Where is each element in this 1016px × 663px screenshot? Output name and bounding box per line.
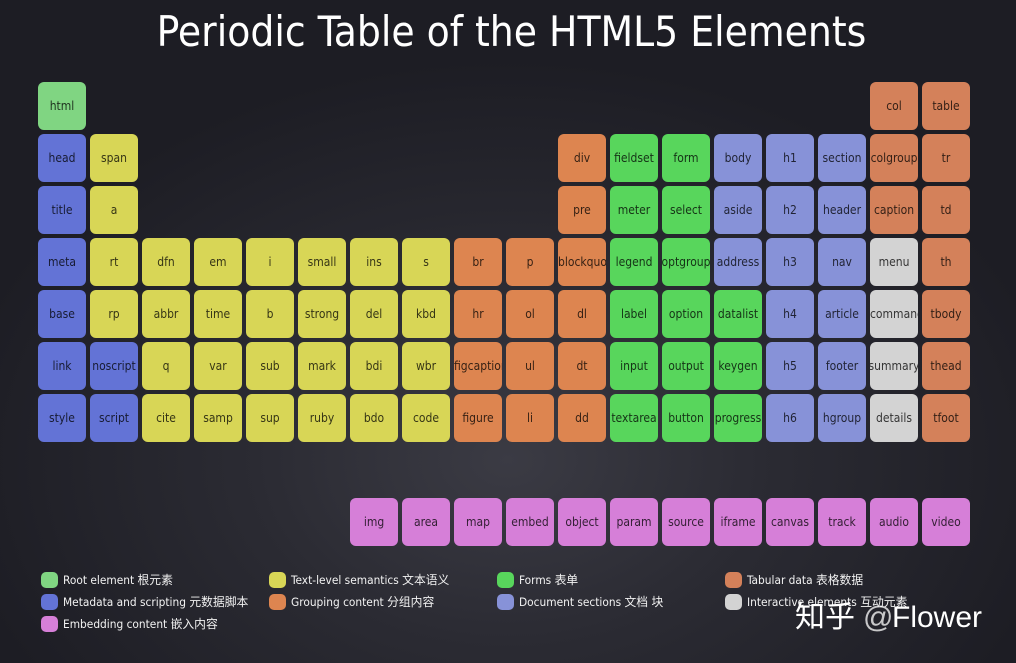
- element: strong: strong: [305, 307, 339, 321]
- element: optgroup: optgroup: [662, 255, 710, 269]
- element: mark: mark: [308, 359, 336, 373]
- element: progress: progress: [715, 411, 761, 425]
- element: figure: [454, 394, 502, 442]
- element: a: a: [111, 203, 117, 217]
- legend item: root element: Root element 根元素: [63, 573, 173, 587]
- element: table: table: [932, 99, 960, 113]
- element: wbr: wbr: [416, 359, 436, 373]
- element: details: details: [876, 411, 912, 425]
- element: base: [38, 290, 86, 338]
- element: div: [558, 134, 606, 182]
- element: fieldset: fieldset: [614, 151, 654, 165]
- element: th: [922, 238, 970, 286]
- element: h1: [766, 134, 814, 182]
- element: fieldset: [610, 134, 658, 182]
- element: label: label: [621, 307, 647, 321]
- element: map: map: [466, 515, 490, 529]
- element: form: form: [673, 151, 699, 165]
- element: select: [662, 186, 710, 234]
- element: h4: [766, 290, 814, 338]
- element: pre: [558, 186, 606, 234]
- element: keygen: keygen: [718, 359, 758, 373]
- element: area: [402, 498, 450, 546]
- element: header: header: [823, 203, 861, 217]
- legend item: forms: [497, 572, 578, 588]
- watermark: 知乎: [795, 601, 855, 634]
- element: summary: [870, 342, 918, 390]
- element: style: style: [49, 411, 75, 425]
- element: sub: sub: [260, 359, 280, 373]
- element: progress: [714, 394, 762, 442]
- legend item: interactive elements: Interactive elements 互动元素: [747, 595, 907, 609]
- element: small: [298, 238, 346, 286]
- element: img: [350, 498, 398, 546]
- legend item: metadata and scripting: Metadata and scripting 元数据脚本: [63, 595, 248, 609]
- element: i: i: [268, 255, 272, 269]
- element: blockquote: [558, 238, 606, 286]
- element: tfoot: [922, 394, 970, 442]
- element: h3: [766, 238, 814, 286]
- element: option: [662, 290, 710, 338]
- element: title: [38, 186, 86, 234]
- element: time: time: [206, 307, 230, 321]
- element: tbody: [922, 290, 970, 338]
- element: audio: audio: [879, 515, 909, 529]
- element: colgroup: colgroup: [871, 151, 917, 165]
- element: p: [506, 238, 554, 286]
- element: h4: h4: [783, 307, 797, 321]
- element: span: [90, 134, 138, 182]
- element: button: button: [668, 411, 704, 425]
- element: dd: dd: [575, 411, 589, 425]
- element: ins: [350, 238, 398, 286]
- element: ruby: [298, 394, 346, 442]
- element: h5: [766, 342, 814, 390]
- element: code: code: [413, 411, 439, 425]
- element: iframe: iframe: [720, 515, 756, 529]
- element: dfn: dfn: [157, 255, 175, 269]
- element: button: [662, 394, 710, 442]
- element: datalist: [714, 290, 762, 338]
- element: var: [194, 342, 242, 390]
- element: div: div: [574, 151, 590, 165]
- element: bdo: bdo: [364, 411, 384, 425]
- element: table: [922, 82, 970, 130]
- element: i: [246, 238, 294, 286]
- element: dd: [558, 394, 606, 442]
- element: sup: [246, 394, 294, 442]
- element: tfoot: tfoot: [933, 411, 959, 425]
- element: ruby: ruby: [310, 411, 334, 425]
- element: hgroup: hgroup: [823, 411, 861, 425]
- legend item: forms: Forms 表单: [519, 573, 578, 587]
- element: hgroup: [818, 394, 866, 442]
- element: footer: footer: [826, 359, 858, 373]
- element: em: [194, 238, 242, 286]
- element: textarea: textarea: [611, 411, 657, 425]
- element: legend: [610, 238, 658, 286]
- element: input: input: [620, 359, 648, 373]
- element: noscript: [90, 342, 138, 390]
- element: pre: pre: [573, 203, 591, 217]
- element: address: [714, 238, 762, 286]
- element: nav: [818, 238, 866, 286]
- element: ol: [506, 290, 554, 338]
- element: ins: ins: [366, 255, 382, 269]
- element: command: [870, 290, 918, 338]
- element: bdi: [350, 342, 398, 390]
- element: tbody: tbody: [931, 307, 961, 321]
- element: h5: h5: [783, 359, 797, 373]
- element: rt: [90, 238, 138, 286]
- element: cite: [142, 394, 190, 442]
- element: menu: menu: [879, 255, 909, 269]
- element: body: body: [725, 151, 751, 165]
- title: Periodic Table of the HTML5 Elements: [157, 7, 866, 56]
- element: rp: rp: [108, 307, 120, 321]
- element: dfn: [142, 238, 190, 286]
- watermark: [795, 601, 982, 634]
- element: caption: caption: [874, 203, 914, 217]
- element: header: [818, 186, 866, 234]
- element: select: select: [670, 203, 702, 217]
- element: track: track: [828, 515, 856, 529]
- legend item: document sections: Document sections 文档 块: [519, 595, 663, 609]
- element: tr: [922, 134, 970, 182]
- element: legend: legend: [616, 255, 652, 269]
- element: samp: samp: [203, 411, 233, 425]
- element: ul: [506, 342, 554, 390]
- element: bdo: [350, 394, 398, 442]
- element: source: [662, 498, 710, 546]
- element: map: [454, 498, 502, 546]
- element: kbd: kbd: [416, 307, 436, 321]
- element: textarea: [610, 394, 658, 442]
- element: h1: h1: [783, 151, 797, 165]
- element: li: li: [527, 411, 533, 425]
- element: title: title: [51, 203, 73, 217]
- element: del: [350, 290, 398, 338]
- element: span: span: [101, 151, 127, 165]
- element: h6: [766, 394, 814, 442]
- element: strong: [298, 290, 346, 338]
- element: h3: h3: [783, 255, 797, 269]
- element: meter: meter: [618, 203, 650, 217]
- element: keygen: [714, 342, 762, 390]
- element: abbr: [142, 290, 190, 338]
- element: a: [90, 186, 138, 234]
- watermark: Flower: [892, 601, 982, 634]
- element: embed: [506, 498, 554, 546]
- element: meter: [610, 186, 658, 234]
- element: hr: [454, 290, 502, 338]
- panel: periodic table grid: [38, 82, 970, 546]
- element: rp: [90, 290, 138, 338]
- element: link: link: [52, 359, 72, 373]
- element: small: small: [308, 255, 336, 269]
- element: h2: [766, 186, 814, 234]
- element: em: em: [209, 255, 227, 269]
- element: input: [610, 342, 658, 390]
- element: video: [922, 498, 970, 546]
- element: h2: h2: [783, 203, 797, 217]
- element: ol: ol: [525, 307, 535, 321]
- element: del: del: [366, 307, 382, 321]
- element: output: output: [668, 359, 704, 373]
- element: area: area: [414, 515, 438, 529]
- element: output: [662, 342, 710, 390]
- element: dl: dl: [577, 307, 587, 321]
- element: s: [402, 238, 450, 286]
- element: li: [506, 394, 554, 442]
- element: link: [38, 342, 86, 390]
- element: article: [818, 290, 866, 338]
- element: caption: [870, 186, 918, 234]
- element: sub: [246, 342, 294, 390]
- element: var: var: [209, 359, 227, 373]
- element: s: s: [423, 255, 429, 269]
- element: form: [662, 134, 710, 182]
- element: time: [194, 290, 242, 338]
- element: mark: [298, 342, 346, 390]
- element: figcaption: [454, 342, 502, 390]
- element: rt: rt: [110, 255, 118, 269]
- element: b: [246, 290, 294, 338]
- element: kbd: [402, 290, 450, 338]
- element: object: [558, 498, 606, 546]
- element: bdi: bdi: [366, 359, 382, 373]
- element: figure: figure: [462, 411, 494, 425]
- element: head: [38, 134, 86, 182]
- element: datalist: datalist: [718, 307, 758, 321]
- element: code: [402, 394, 450, 442]
- element: track: [818, 498, 866, 546]
- element: td: [922, 186, 970, 234]
- element: thead: thead: [930, 359, 962, 373]
- element: canvas: canvas: [771, 515, 809, 529]
- element: menu: [870, 238, 918, 286]
- element: dt: dt: [576, 359, 588, 373]
- element: script: script: [99, 411, 129, 425]
- element: footer: [818, 342, 866, 390]
- element: option: option: [669, 307, 703, 321]
- element: thead: [922, 342, 970, 390]
- legend item: tabular data: Tabular data 表格数据: [747, 573, 863, 587]
- element: base: base: [49, 307, 75, 321]
- element: dt: [558, 342, 606, 390]
- element: q: [142, 342, 190, 390]
- element: br: br: [472, 255, 484, 269]
- element: video: video: [931, 515, 961, 529]
- element: aside: aside: [724, 203, 752, 217]
- element: hr: hr: [472, 307, 484, 321]
- element: sup: sup: [260, 411, 280, 425]
- element: tr: tr: [942, 151, 950, 165]
- legend: [41, 572, 907, 632]
- element: head: head: [49, 151, 75, 165]
- element: aside: [714, 186, 762, 234]
- element: noscript: noscript: [92, 359, 136, 373]
- element: details: [870, 394, 918, 442]
- element: optgroup: [662, 238, 710, 286]
- element: samp: [194, 394, 242, 442]
- element: section: section: [823, 151, 861, 165]
- element: td: td: [940, 203, 952, 217]
- element: dl: [558, 290, 606, 338]
- element: q: q: [163, 359, 169, 373]
- watermark: @: [863, 601, 893, 634]
- element: h6: h6: [783, 411, 797, 425]
- element: object: object: [565, 515, 599, 529]
- element: ul: ul: [525, 359, 535, 373]
- element: col: col: [886, 99, 902, 113]
- element: abbr: abbr: [154, 307, 178, 321]
- element: section: [818, 134, 866, 182]
- element: iframe: [714, 498, 762, 546]
- legend item: text-level semantics: Text-level semantics 文本语义: [291, 573, 449, 587]
- element: colgroup: [870, 134, 918, 182]
- element: body: [714, 134, 762, 182]
- element: br: [454, 238, 502, 286]
- element: img: img: [364, 515, 384, 529]
- element: address: address: [717, 255, 759, 269]
- element: p: p: [527, 255, 533, 269]
- element: param: [610, 498, 658, 546]
- element: param: param: [616, 515, 652, 529]
- element: wbr: [402, 342, 450, 390]
- element: b: b: [267, 307, 273, 321]
- element: style: [38, 394, 86, 442]
- legend item: grouping content: Grouping content 分组内容: [291, 595, 434, 609]
- element: source: source: [668, 515, 704, 529]
- legend item: embedding content: Embedding content 嵌入内容: [63, 617, 218, 631]
- element: audio: [870, 498, 918, 546]
- element: col: [870, 82, 918, 130]
- element: nav: nav: [832, 255, 852, 269]
- element: canvas: [766, 498, 814, 546]
- element: label: [610, 290, 658, 338]
- element: meta: meta: [48, 255, 76, 269]
- element: html: html: [50, 99, 74, 113]
- element: cite: cite: [156, 411, 176, 425]
- element: embed: embed: [511, 515, 549, 529]
- element: html: [38, 82, 86, 130]
- element: article: article: [825, 307, 859, 321]
- element: meta: [38, 238, 86, 286]
- element: th: th: [940, 255, 952, 269]
- element: script: [90, 394, 138, 442]
